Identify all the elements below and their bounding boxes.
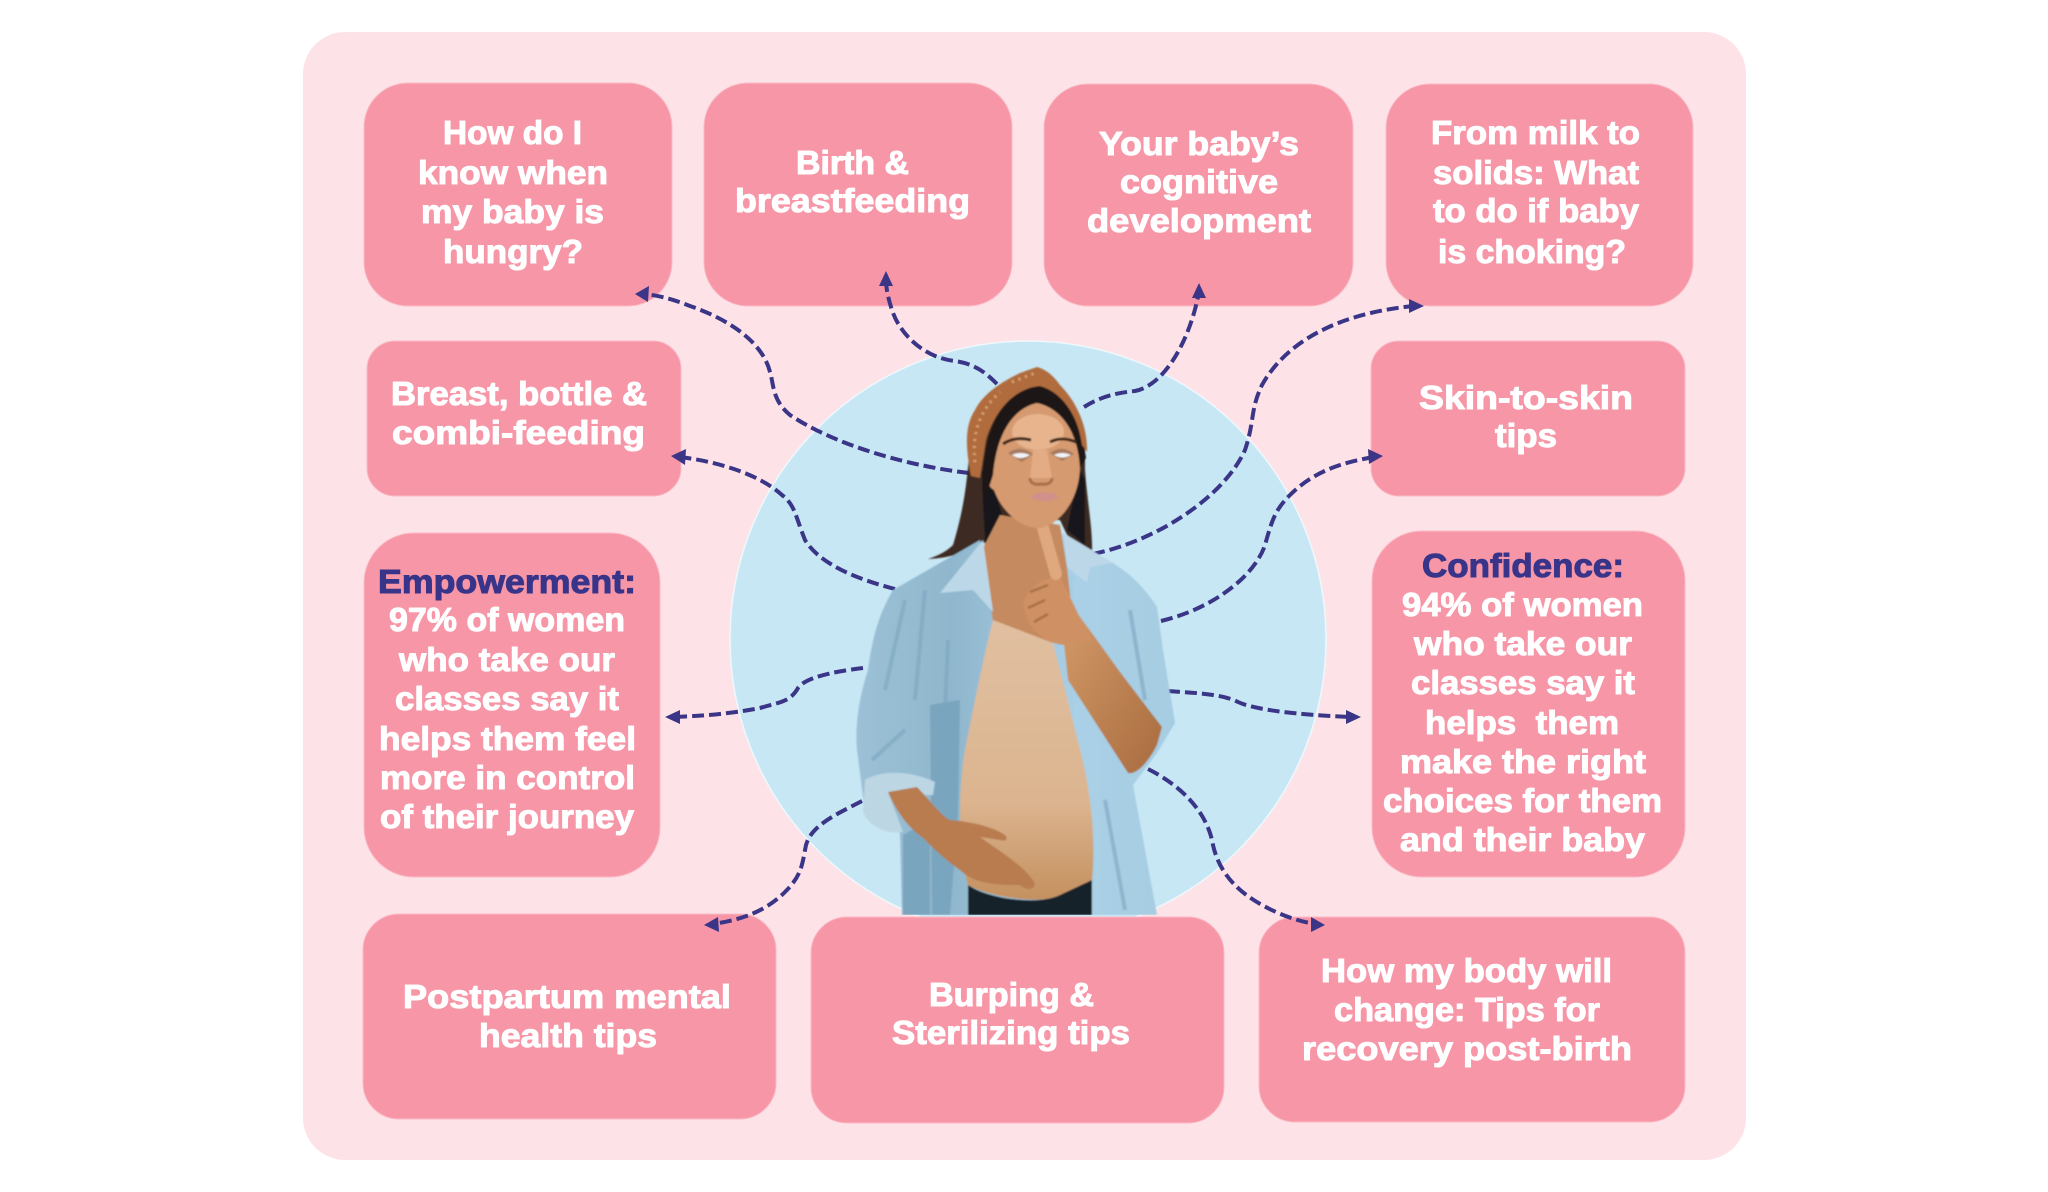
card: Postpartum mental health tips: health tips <box>479 1017 657 1054</box>
card: From milk to solids: From milk to <box>1431 114 1640 151</box>
nose highlight <box>1030 450 1052 478</box>
face highlight <box>1012 414 1064 450</box>
nose shade <box>1030 478 1052 484</box>
shirt folds <box>872 590 1145 910</box>
arrow: to Empowerment statistic <box>665 668 863 724</box>
card: Confidence statistic: who take our <box>1413 625 1632 662</box>
card: Empowerment statistic <box>364 533 660 877</box>
headband dots <box>974 373 1035 462</box>
hair back <box>928 383 1092 559</box>
lips <box>1029 492 1059 501</box>
card: Burping and sterilizing tips: Burping & <box>929 976 1094 1013</box>
card: How do I know when my baby is hungry: hungry? <box>443 233 583 270</box>
circle backdrop <box>730 341 1326 937</box>
arrow: to How do I know <box>635 286 969 473</box>
card: Empowerment statistic: more in control <box>380 759 635 796</box>
card: Skin-to-skin tips <box>1371 341 1685 496</box>
card: Empowerment statistic: helps them feel <box>379 720 636 757</box>
card: From milk to solids <box>1386 84 1693 306</box>
card: How do I know when my baby is hungry: know when <box>418 154 608 191</box>
collar <box>940 533 1113 612</box>
card: How my body will change: recovery post-birth <box>1302 1030 1632 1067</box>
card: Empowerment statistic: of their journey <box>380 798 635 835</box>
card: Confidence statistic: and their baby <box>1400 821 1646 858</box>
card: Your baby's cognitive development: development <box>1087 202 1311 239</box>
jeans <box>968 880 1092 915</box>
arrow: to Your baby's cognitive development <box>1084 283 1206 407</box>
arrow: to How my body will change <box>1148 769 1325 932</box>
face <box>987 403 1080 528</box>
card: Skin-to-skin tips: tips <box>1495 417 1557 454</box>
arrow: to Skin-to-skin tips <box>1161 449 1383 621</box>
card: Your baby's cognitive development <box>1044 84 1353 306</box>
shirt inner shade <box>903 700 960 915</box>
belly <box>960 620 1093 900</box>
neck and chest <box>983 515 1072 643</box>
dark hair beside face <box>982 470 1085 545</box>
infographic <box>303 32 1746 1160</box>
card: How do I know when my baby is hungry <box>364 83 672 306</box>
card: Your baby's cognitive development: cognitive <box>1120 163 1278 200</box>
card: Confidence statistic: 94% of women <box>1402 586 1643 623</box>
card: Birth and breastfeeding <box>704 83 1012 306</box>
card: Skin-to-skin tips: Skin-to-skin <box>1419 379 1633 416</box>
card: Postpartum mental health tips: Postpartum mental <box>403 978 731 1015</box>
card: From milk to solids: is choking? <box>1438 233 1626 270</box>
lower arm and hand on belly <box>888 787 1035 889</box>
photo: pregnant woman looking up <box>856 367 1175 915</box>
card: Empowerment statistic: classes say it <box>395 680 619 717</box>
arrow: to Birth and breastfeeding <box>879 271 997 384</box>
card: How do I know when my baby is hungry: How do I <box>443 114 582 151</box>
finger <box>1043 528 1056 574</box>
card: From milk to solids: solids: What <box>1433 154 1639 191</box>
eye sockets <box>1008 449 1074 462</box>
card: Breast, bottle and combi-feeding: Breast, bottle & <box>391 375 647 412</box>
card: How my body will change <box>1259 917 1685 1122</box>
card: Confidence statistic: make the right <box>1400 743 1646 780</box>
card: Your baby's cognitive development: Your baby’s <box>1099 125 1299 162</box>
card: How my body will change: How my body will <box>1321 952 1612 989</box>
arrow: to Breast, bottle and combi-feeding <box>671 449 895 589</box>
card: How do I know when my baby is hungry: my baby is <box>421 193 604 230</box>
eyes <box>1012 453 1071 458</box>
panel: background <box>303 32 1746 1160</box>
card: Postpartum mental health tips <box>363 914 776 1119</box>
raised arm <box>1063 610 1162 773</box>
arrow: to Postpartum mental health tips <box>704 801 862 932</box>
headband <box>967 367 1087 478</box>
card: Empowerment statistic: Empowerment: <box>378 563 636 600</box>
card: Empowerment statistic: 97% of women <box>389 601 625 638</box>
card: Confidence statistic: choices for them <box>1383 782 1662 819</box>
card: How my body will change: change: Tips for <box>1334 991 1600 1028</box>
card: Empowerment statistic: who take our <box>398 641 615 678</box>
card: Breast, bottle and combi-feeding <box>367 341 681 496</box>
hand at chin <box>1024 579 1078 646</box>
card: Burping and sterilizing tips: Sterilizing tips <box>892 1014 1130 1051</box>
card: Breast, bottle and combi-feeding: combi-feeding <box>392 414 645 451</box>
card: Confidence statistic: classes say it <box>1411 664 1635 701</box>
shirt <box>856 533 1175 915</box>
eyebrows <box>1003 439 1076 444</box>
card: From milk to solids: to do if baby <box>1433 192 1640 229</box>
front hair <box>983 386 1087 487</box>
arrow: to From milk to solids <box>1093 299 1424 554</box>
shirt cuff <box>863 773 935 833</box>
arrow: to Confidence statistic <box>1168 691 1361 724</box>
card: Confidence statistic: helps them <box>1425 704 1619 741</box>
card: Confidence statistic: Confidence: <box>1422 547 1624 584</box>
card: Birth and breastfeeding: Birth & <box>796 144 909 181</box>
finger curls <box>1028 585 1048 622</box>
card: Birth and breastfeeding: breastfeeding <box>735 182 970 219</box>
card: Burping and sterilizing tips <box>811 917 1224 1123</box>
card: Confidence statistic <box>1372 531 1685 877</box>
